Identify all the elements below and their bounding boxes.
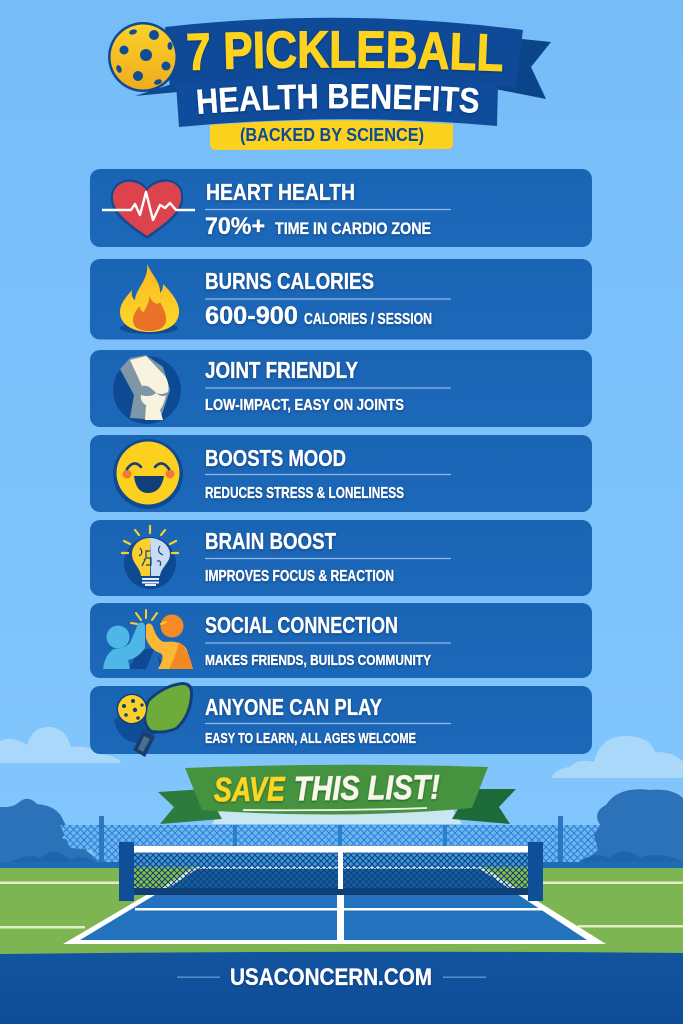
title text line two: HEALTH BENEFITS [196, 84, 479, 116]
stat: 600-900 [205, 302, 298, 330]
subtitle strip [210, 120, 453, 150]
save this list banner [158, 765, 516, 824]
icon: brain light bulb [122, 526, 178, 589]
heading: SOCIAL CONNECTION [205, 612, 398, 638]
description: CALORIES / SESSION [304, 311, 432, 328]
description: REDUCES STRESS & LONELINESS [205, 485, 404, 502]
heading: BRAIN BOOST [205, 528, 336, 554]
panel: burns calories [90, 259, 592, 340]
website url: USACONCERN.COM [230, 964, 432, 991]
heading: ANYONE CAN PLAY [205, 694, 382, 720]
banner text: THIS LIST! [294, 769, 440, 808]
trees left [0, 799, 100, 868]
banner text [214, 769, 440, 809]
cloud left [0, 727, 121, 763]
title text line one: 7 PICKLEBALL [186, 30, 503, 74]
icon: paddle and ball [114, 682, 193, 757]
panel: joint friendly [90, 350, 592, 427]
icon: knee joint [113, 355, 181, 424]
description: MAKES FRIENDS, BUILDS COMMUNITY [205, 652, 431, 669]
trees right [575, 789, 683, 868]
panel: brain boost [90, 520, 592, 596]
pickleball court [63, 867, 606, 944]
panel: boosts mood [90, 435, 592, 512]
icon: smiling face [113, 439, 183, 509]
tennis net [119, 842, 543, 901]
heading: HEART HEALTH [206, 179, 355, 205]
description: IMPROVES FOCUS & REACTION [205, 568, 394, 585]
description: TIME IN CARDIO ZONE [275, 220, 431, 238]
heading: JOINT FRIENDLY [205, 357, 358, 383]
description: LOW-IMPACT, EASY ON JOINTS [205, 397, 404, 414]
stat: 70%+ [205, 213, 265, 240]
icon: pickleball [108, 22, 178, 92]
cloud right [551, 736, 683, 778]
title ribbon [135, 18, 551, 150]
panel: anyone can play [90, 682, 592, 757]
description: EASY TO LEARN, ALL AGES WELCOME [205, 730, 416, 747]
icon: heart with pulse [102, 179, 195, 239]
banner text: SAVE [214, 771, 286, 809]
fence [0, 816, 683, 868]
panel: heart health [90, 169, 592, 247]
heading: BOOSTS MOOD [205, 445, 346, 471]
icon: flame [120, 264, 179, 334]
icon: two people high five [103, 610, 193, 669]
heading: BURNS CALORIES [205, 268, 374, 294]
panel: social connection [90, 603, 592, 678]
grass [0, 868, 683, 954]
footer band [0, 952, 683, 1024]
subtitle text: (BACKED BY SCIENCE) [240, 125, 424, 145]
